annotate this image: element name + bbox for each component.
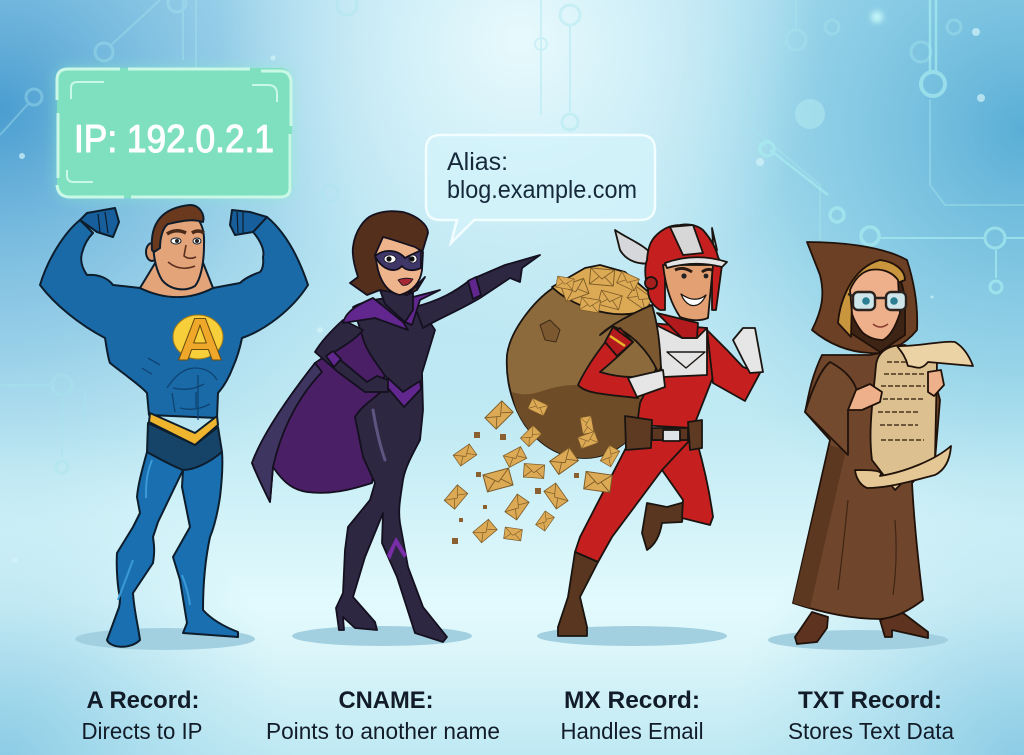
near arm [578,328,638,398]
hood [807,242,917,353]
scroll [871,345,937,490]
hair [838,260,905,337]
ground shadow: MX Record [537,626,727,646]
front leg [575,440,690,562]
mouth [873,324,888,327]
left fist [80,208,119,237]
character: CNAME hero [252,211,540,642]
cape [252,330,385,502]
caption: CNAME: Points to another name [266,718,500,744]
front boot [558,552,598,636]
face [663,265,713,320]
caption: MX Record: Handles Email [560,718,704,744]
IP hologram panel [57,68,292,198]
face [375,237,423,295]
epaulette [605,327,633,356]
near glove [628,370,665,397]
wing [615,230,653,264]
hands [848,384,882,410]
belt [149,413,218,445]
sack strap [600,305,661,372]
torso [637,323,713,428]
shoulder yoke [343,290,440,330]
sleeve [805,362,858,455]
torso and arms [40,217,308,418]
body and legs [336,297,447,642]
mask [375,250,421,270]
IP text: IP: 192.0.2.1 [74,118,274,161]
label: MX Record: MX Record: [564,687,700,714]
scroll writing [878,362,925,440]
rear boot [642,502,685,550]
belt [652,428,688,440]
ground shadow: A Record [75,628,255,650]
alias speech bubble [426,135,655,243]
robe [793,345,940,619]
caption: A Record: Directs to IP [82,718,202,744]
pointing arm [415,255,540,328]
neck [140,255,213,297]
legs [107,452,238,647]
lips [398,278,413,285]
hair [350,211,428,295]
smile [681,294,706,306]
face [850,269,900,340]
label: TXT Record: TXT Record: [798,687,942,714]
neck [380,290,413,322]
chest emblem: A [177,306,223,373]
character: A Record hero [40,205,308,647]
helmet [645,224,722,310]
mail sack [507,288,660,458]
far shoulder and arm [707,330,760,401]
glasses [848,292,906,310]
label: CNAME: CNAME: [338,687,434,714]
ground shadow: TXT Record [768,630,948,650]
right fist [230,210,267,235]
collar [657,313,698,338]
labels [82,687,954,744]
caption: TXT Record: Stores Text Data [788,718,954,744]
brim [665,257,727,268]
white chest panel [652,323,707,377]
head [146,205,204,289]
alias text: Alias: [447,148,508,176]
character: TXT Record scribe [793,242,973,644]
character: MX Record hero [507,224,763,636]
ground shadow: CNAME [292,626,472,646]
left shoe [795,612,828,644]
boot chevron [387,537,407,560]
far glove [733,328,763,373]
envelopes in sack [552,265,653,314]
alias text: blog.example.com [447,176,637,204]
right shoe [880,613,928,638]
bent arm [315,320,388,392]
falling envelopes [444,398,620,544]
label: A Record: A Record: [86,687,200,714]
trunks [147,423,222,470]
rear leg [640,442,713,525]
waist chevron [386,378,421,407]
